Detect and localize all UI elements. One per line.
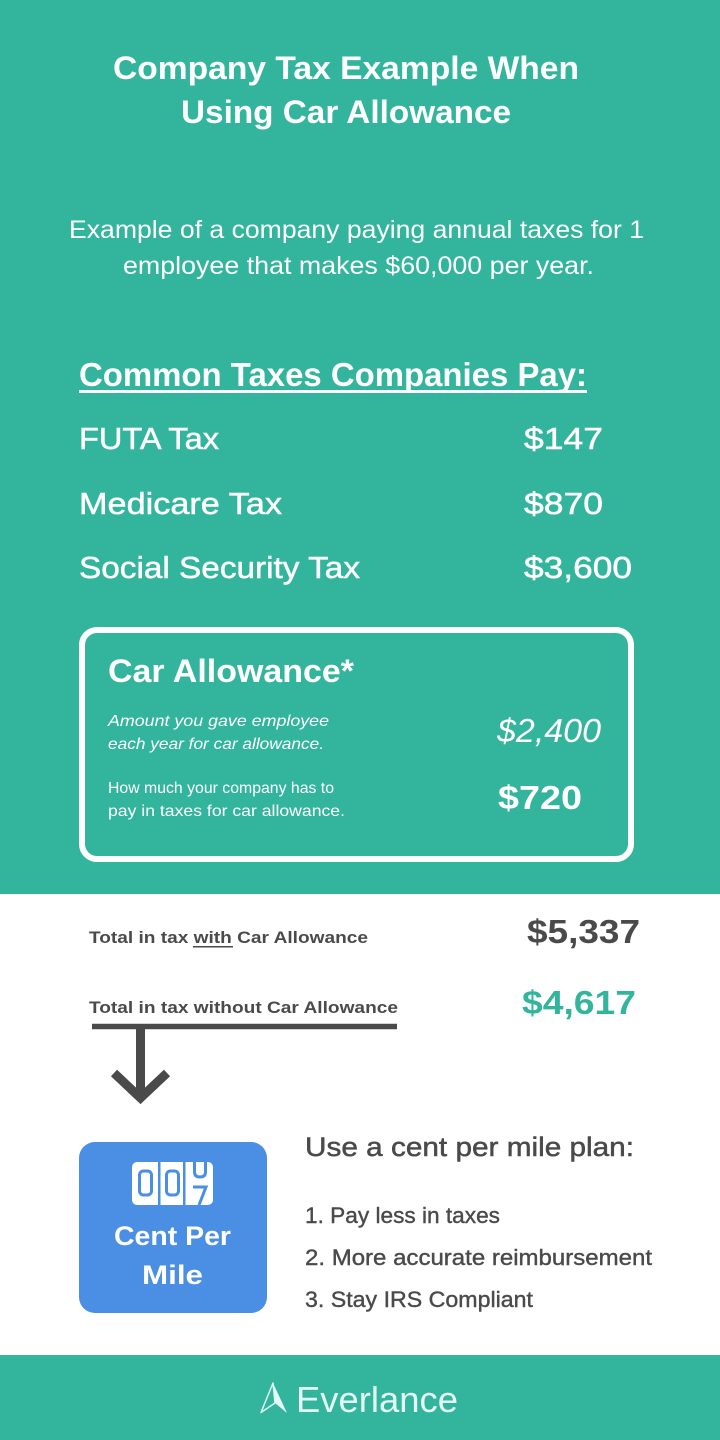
row: Social Security tax	[79, 550, 632, 585]
benefits list: 2. More accurate reimbursement	[305, 1245, 652, 1270]
row: FUTA tax: FUTA Tax	[79, 421, 220, 456]
row: FUTA tax	[79, 421, 603, 456]
arrow	[92, 1026, 397, 1099]
title: Using Car Allowance	[181, 94, 511, 130]
panel: car allowance	[82, 630, 631, 859]
wordmark: Everlance	[296, 1379, 458, 1420]
title	[113, 50, 579, 130]
intro text: Example of a company paying annual taxes for 1	[69, 216, 644, 244]
panel: footer	[0, 1355, 720, 1440]
panel: green header background	[0, 0, 720, 894]
row: Medicare tax: $870	[524, 486, 603, 521]
badge label	[114, 1221, 232, 1290]
icon: odometer	[132, 1162, 213, 1205]
cent per mile heading: Use a cent per mile plan:	[305, 1132, 634, 1162]
panel: cent per mile badge	[79, 1142, 267, 1313]
intro text: employee that makes $60,000 per year.	[123, 252, 594, 280]
total with car allowance: $5,337	[527, 913, 640, 950]
badge label: Cent Per	[114, 1221, 232, 1251]
benefits list	[305, 1203, 652, 1312]
row: FUTA tax: $147	[524, 421, 603, 456]
allowance description: each year for car allowance.	[108, 736, 324, 753]
benefits list: 3. Stay IRS Compliant	[305, 1287, 533, 1312]
benefits list: 1. Pay less in taxes	[305, 1203, 500, 1228]
company tax description	[108, 780, 345, 820]
total without car allowance: $4,617	[522, 984, 636, 1021]
footer logo	[261, 1379, 458, 1420]
total with car allowance	[89, 913, 640, 950]
car allowance heading: Car Allowance*	[108, 653, 355, 689]
total without car allowance: Total in tax without Car Allowance	[89, 998, 398, 1017]
company tax amount: $720	[498, 779, 582, 816]
heading: common taxes: Common Taxes Companies Pay:	[79, 356, 587, 393]
intro text	[69, 216, 644, 280]
title: Company Tax Example When	[113, 50, 579, 86]
total without car allowance	[89, 984, 636, 1021]
total with car allowance: Total in tax with Car Allowance	[89, 928, 368, 947]
badge label: Mile	[142, 1260, 203, 1290]
row: Social Security tax: $3,600	[524, 550, 632, 585]
allowance description: Amount you gave employee	[107, 713, 329, 730]
company tax description: pay in taxes for car allowance.	[108, 803, 345, 820]
allowance description	[107, 713, 329, 753]
company tax description: How much your company has to	[108, 780, 334, 797]
row: Social Security tax: Social Security Tax	[79, 550, 361, 585]
allowance amount: $2,400	[496, 712, 602, 749]
row: Medicare tax: Medicare Tax	[79, 486, 283, 521]
icon: Everlance arrow mark	[261, 1383, 287, 1413]
tax list	[79, 421, 632, 585]
row: Medicare tax	[79, 486, 603, 521]
